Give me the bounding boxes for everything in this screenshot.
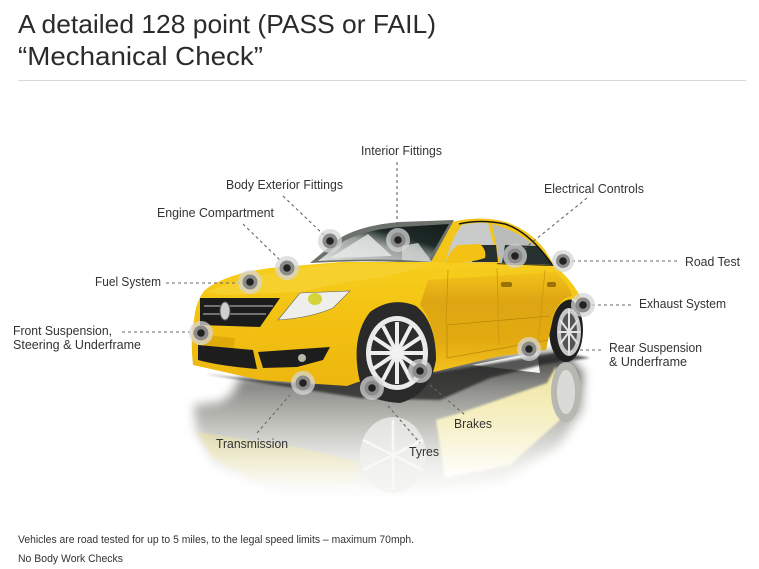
- rear wheel: [549, 298, 583, 362]
- callout labels: Exhaust System: [639, 297, 726, 311]
- leader lines: [122, 162, 680, 443]
- car roof and cabin: [430, 218, 556, 268]
- callout labels: Interior Fittings: [361, 144, 442, 158]
- side windows: [446, 223, 498, 263]
- callout labels: Road Test: [685, 255, 741, 269]
- number plate: [204, 335, 235, 353]
- footnotes: [18, 534, 414, 565]
- main body: [192, 262, 581, 386]
- windscreen: [310, 220, 454, 264]
- callout labels: Rear Suspension: [609, 341, 702, 355]
- headlight: [278, 291, 350, 320]
- wing mirror: [446, 244, 485, 263]
- title: “Mechanical Check”: [18, 41, 263, 71]
- callout labels: Fuel System: [95, 275, 161, 289]
- callout labels: Electrical Controls: [544, 182, 644, 196]
- footnotes: No Body Work Checks: [18, 553, 123, 565]
- callout labels: Brakes: [454, 417, 492, 431]
- marker dots: [189, 228, 595, 400]
- car shadow: [205, 352, 590, 400]
- callout labels: Steering & Underframe: [13, 338, 141, 352]
- grille: [200, 298, 280, 327]
- fog lamp intake: [258, 347, 330, 368]
- door handles: [501, 282, 512, 287]
- body side: [420, 272, 572, 372]
- title: [18, 9, 436, 71]
- title: A detailed 128 point (PASS or FAIL): [18, 9, 436, 39]
- callout labels: [13, 144, 741, 459]
- callout labels: Transmission: [216, 437, 288, 451]
- callout labels: Body Exterior Fittings: [226, 178, 343, 192]
- car reflection: [194, 352, 583, 498]
- hood highlight: [207, 264, 428, 295]
- lower intake: [198, 345, 257, 369]
- car: [192, 218, 590, 403]
- callout labels: Engine Compartment: [157, 206, 275, 220]
- callout labels: Front Suspension,: [13, 324, 112, 338]
- front wheel: [357, 302, 436, 403]
- footnotes: Vehicles are road tested for up to 5 miles, to the legal speed limits – maximum 70mph.: [18, 534, 414, 546]
- callout labels: & Underframe: [609, 355, 687, 369]
- callout labels: Tyres: [409, 445, 439, 459]
